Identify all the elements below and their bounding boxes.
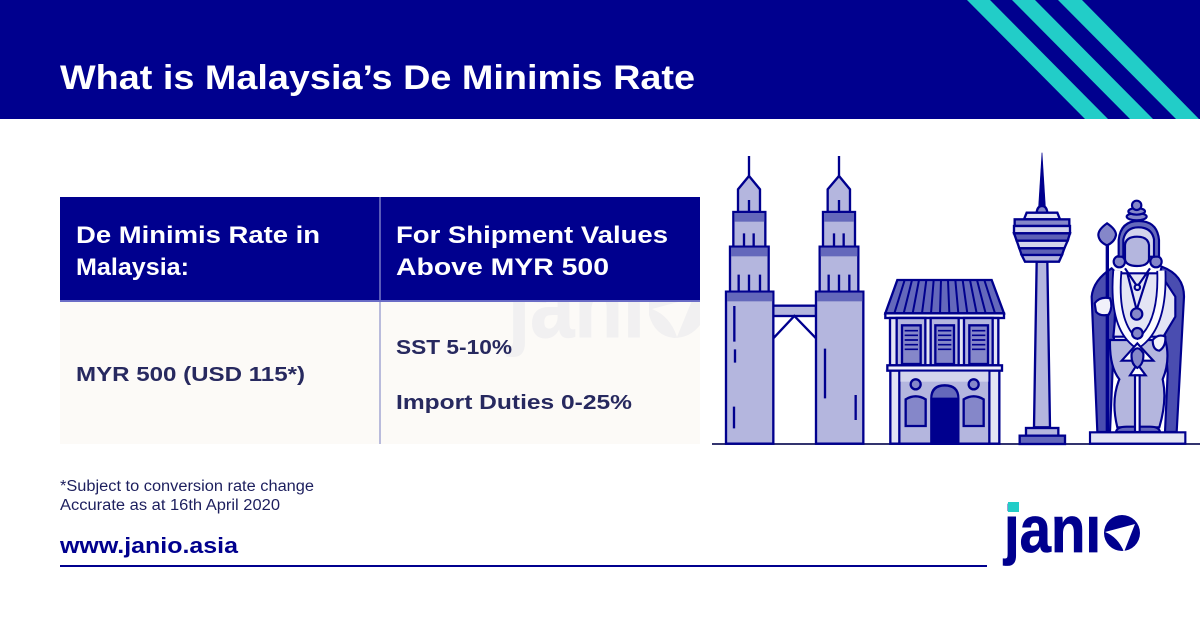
hands [1095,298,1111,315]
website url: www.janio.asia [59,533,239,558]
roof [885,280,1004,318]
right tower [816,156,863,444]
janio logo: janı [1002,492,1101,566]
illustration: twin towers [726,156,863,444]
skybridge [773,306,816,338]
header cell: shipment values: For Shipment Values [396,222,668,249]
left tower [726,156,773,444]
header cell: shipment values: Above MYR 500 [396,254,609,281]
header banner [0,0,1200,119]
pendant [1122,343,1153,361]
table body background [60,300,700,444]
table header row [60,197,700,300]
header cell: de minimis rate: De Minimis Rate in [76,222,320,249]
cell: taxes [396,336,632,414]
table [60,197,700,444]
pedestal [1090,432,1185,444]
spear [1102,243,1112,432]
arched door [931,385,958,444]
illustration: KL tower [1014,153,1070,444]
head [1114,201,1162,267]
header cell: de minimis rate: Malaysia: [76,254,189,281]
shutters [902,325,988,364]
cell: taxes: Import Duties 0-25% [396,391,632,414]
ground floor [890,371,999,444]
title: What is Malaysia’s De Minimis Rate [60,59,695,97]
footnote: Accurate as at 16th April 2020 [60,497,280,514]
cape [1092,267,1184,432]
cell: rate value: MYR 500 (USD 115*) [76,364,305,386]
ground line [712,443,1200,445]
cell: taxes: SST 5-10% [396,336,512,359]
header cell: de minimis rate [76,222,320,281]
footnote [60,478,314,514]
footnote: *Subject to conversion rate change [60,478,314,495]
upper floor [890,318,998,365]
logo arrow disc [1104,515,1140,551]
header cell: shipment values [396,222,668,281]
teal diagonal stripes [967,0,1199,119]
garland [1117,271,1161,344]
crown [1127,201,1147,220]
torso [1113,273,1175,337]
illustration: Murugan statue [1090,201,1185,444]
necklaces [1125,268,1150,310]
watermark logo: janı [506,253,645,357]
illustration: shophouse [885,280,1004,444]
legs [1110,340,1167,427]
